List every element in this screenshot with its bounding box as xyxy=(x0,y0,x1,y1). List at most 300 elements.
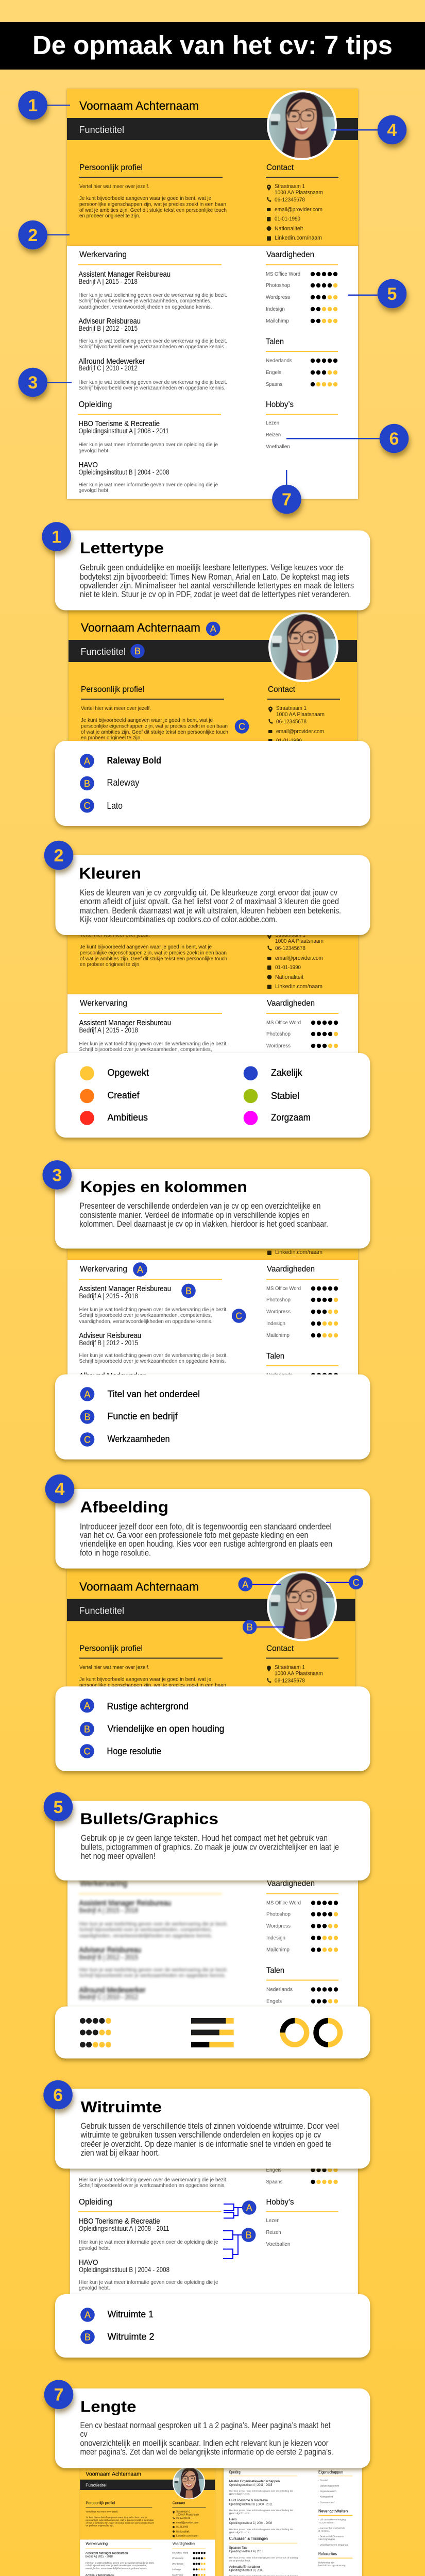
panel: annotated cv overview: Nationaliteit xyxy=(275,226,303,232)
panel: annotated cv overview: Photoshop xyxy=(266,282,290,289)
heading: Afbeelding xyxy=(80,1498,168,1516)
panel: tip 7 cv page 2 miniature: beschikbaar op aanvraag xyxy=(318,2564,346,2567)
panel: annotated cv overview: Vertel hier wat meer over jezelf. xyxy=(79,183,149,190)
body text: consistente manier. Verdeel de informatie op in verschillende kopjes en xyxy=(79,1210,310,1220)
panel: tip 3 legend: A xyxy=(84,1389,91,1399)
panel: tip 4 afbeelding xyxy=(45,1475,370,1568)
badge 7: 7 xyxy=(54,2385,63,2405)
panel: tip 7 cv page 1 miniature: MS Office Word xyxy=(172,2552,189,2555)
panel: annotated cv overview: Bedrijf C | 2010 - 2012 xyxy=(78,364,138,372)
panel: tip 6 legend xyxy=(55,2294,370,2358)
panel: tip 6 cv excerpt: Opleidingsinstituut B | 2004 - 2008 xyxy=(79,2266,169,2274)
panel: tip 7 cv page 1 miniature: Werkervaring xyxy=(86,2541,108,2546)
panel: tip 7 cv page 1 miniature: of wat je ambities zijn. Geef dit stukje tekst een persoonlijke touch xyxy=(86,2521,154,2524)
callouts on photo tip 4: A xyxy=(242,1580,248,1590)
panel: annotated cv overview: Persoonlijk profiel xyxy=(79,163,143,172)
panel: tip 1 cv excerpt xyxy=(69,607,357,762)
panel: tip 7 cv page 2 miniature: Opleidingsinstituut B | 2008 - 2011 xyxy=(229,2503,273,2506)
panel: tip 5 cv excerpt xyxy=(67,1876,358,2010)
panel: tip 1 cv excerpt: Functietitel xyxy=(80,647,126,657)
heading: Kopjes en kolommen xyxy=(80,1178,247,1196)
panel: tip 2 colour legend: Ambitieus xyxy=(107,1112,148,1123)
panel: tip 7 cv page 2 miniature: Opleidingsinstituut B | 2009 xyxy=(229,2569,263,2572)
panel: tip 1 legend: Lato xyxy=(107,801,123,811)
panel: tip 4 cv excerpt: Persoonlijk profiel xyxy=(79,1645,143,1653)
panel: tip 6 witruimte xyxy=(43,2080,370,2168)
heading: Lengte xyxy=(80,2398,136,2416)
panel: annotated cv overview: Mailchimp xyxy=(266,318,289,324)
callout badges tip 1: A xyxy=(210,624,216,634)
panel: tip 7 cv page 1 miniature: persoonlijke eigenschappen zijn, wat je precies zoekt in een baan xyxy=(86,2519,154,2522)
numbered markers on overview: 3 xyxy=(28,373,38,393)
panel: tip 5 cv excerpt: Talen xyxy=(266,1966,284,1975)
panel: tip 4 cv excerpt: Functietitel xyxy=(79,1605,124,1616)
panel: tip 6 cv excerpt: Spaans xyxy=(266,2179,282,2185)
body text: vriendelijke en open houding. Kies voor een rustige achtergrond en plaats een xyxy=(80,1539,332,1549)
panel: tip 1 cv excerpt: of wat je ambities zijn. Geef dit stukje tekst een persoonlijke touch xyxy=(81,729,228,735)
panel: tip 5 cv excerpt: MS Office Word xyxy=(266,1900,301,1906)
badge 3 xyxy=(42,1160,72,1190)
panel: tip 7 cv page 1 miniature: Je kunt bijvoorbeeld aangeven waar je goed in bent, wat je xyxy=(86,2516,147,2519)
blurred left column: Allround Medewerker xyxy=(79,1987,146,1995)
badge 1: 1 xyxy=(52,528,61,547)
panel: annotated cv overview: Bedrijf A | 2015 - 2018 xyxy=(78,278,138,285)
panel: tip 7 cv page 1 miniature: Nationaliteit xyxy=(176,2530,190,2533)
panel: annotated cv overview: gevolgd hebt. xyxy=(78,487,110,494)
panel: tip 7 cv page 2 miniature: Referenties xyxy=(318,2552,337,2556)
body text: creëer je overzicht. Op deze manier is de informatie snel te vinden en goed te xyxy=(80,2139,332,2149)
badge 2: 2 xyxy=(54,846,63,866)
body text xyxy=(80,2420,333,2457)
blurred left column: Werkervaring xyxy=(80,1879,127,1888)
whitespace brackets and callouts: B xyxy=(246,2230,252,2240)
panel: tip 1 legend: A xyxy=(84,756,90,767)
bar ratings xyxy=(191,2018,234,2047)
heading: Bullets/Graphics xyxy=(80,1809,218,1828)
body text xyxy=(79,1201,328,1229)
panel: tip 7 cv page 1 miniature: Schrijf bijvoorbeeld over je werkzaamheden, competenties, xyxy=(86,2564,147,2567)
body text xyxy=(80,888,341,924)
panel: annotated cv overview: Engels xyxy=(266,369,281,376)
panel: tip 3 legend: Titel van het onderdeel xyxy=(107,1389,200,1399)
panel: tip 7 cv page 2 miniature: - Bestuurslid Gemeente xyxy=(318,2535,344,2538)
panel: tip 1 cv excerpt: en probeer origineel te zijn. xyxy=(81,735,142,741)
panel: annotated cv overview: Straatnaam 1 xyxy=(275,183,305,190)
panel: annotated cv overview: Hier kun je wat meer informatie geven over de opleiding die je xyxy=(78,442,218,448)
body text: meer pagina’s. Zet dan wel de belangrijkste informatie op de eerste 2 pagina’s. xyxy=(80,2447,333,2457)
panel: tip 2 cv excerpt: Straatnaam 1 xyxy=(275,932,305,938)
callout badges tip 1: C xyxy=(239,721,245,732)
blurred left column: Schrijf bijvoorbeeld over je werkzaamheden, competenties, xyxy=(79,1927,212,1933)
panel: annotated cv overview: Allround Medewerker xyxy=(78,358,145,366)
panel: tip 6 cv excerpt: Hobby’s xyxy=(266,2198,294,2207)
panel: tip 2 cv excerpt: en probeer origineel te zijn. xyxy=(80,961,141,968)
numbered markers on overview: 7 xyxy=(282,490,292,510)
panel: tip 7 cv page 2 miniature: - Klantgericht xyxy=(318,2496,333,2499)
panel: tip 7 cv page 2 miniature: - Organisatorisch xyxy=(318,2490,336,2493)
panel: tip 7 cv page 2 miniature: X Heren 1 xyxy=(318,2530,330,2533)
panel: tip 2 cv excerpt: email@provider.com xyxy=(275,955,323,961)
panel: tip 4 cv excerpt: Voornaam Achternaam xyxy=(79,1580,199,1593)
panel: tip 1 cv excerpt: email@provider.com xyxy=(276,728,324,735)
numbered markers on overview: 1 xyxy=(28,96,38,115)
panel: tip 6 legend: A xyxy=(84,2310,91,2320)
panel: tip 2 colour legend: Opgewekt xyxy=(107,1067,149,1078)
panel: tip 2 cv excerpt: Je kunt bijvoorbeeld aangeven waar je goed in bent, wat je xyxy=(80,944,212,950)
panel: tip 3 legend: C xyxy=(84,1434,91,1445)
panel: tip 1 lettertype xyxy=(42,522,370,610)
blurred left column: Schrijf bijvoorbeeld over je werkzaamheden en opgedane kennis. xyxy=(79,1972,226,1978)
badge 3: 3 xyxy=(52,1165,62,1185)
badge 6 xyxy=(43,2080,73,2109)
body text: cv xyxy=(80,2429,88,2439)
panel: tip 5 bullets graphics xyxy=(44,1792,370,1880)
blurred left column: Bedrijf C | 2010 - 2012 xyxy=(79,1993,138,2001)
panel: tip 2 cv excerpt: Wordpress xyxy=(266,1043,291,1049)
panel: tip 2 cv excerpt: 06-12345678 xyxy=(275,945,305,952)
panel: tip 6 legend: B xyxy=(84,2332,91,2342)
body text: onoverzichtelijk en moeilijk scanbaar. Indien echt relevant kun je kiezen voor xyxy=(80,2438,329,2448)
panel: tip 7 cv page 1 miniature: Indesign xyxy=(172,2568,181,2571)
panel: tip 1 cv excerpt: Contact xyxy=(268,685,296,694)
panel: tip 4 cv excerpt: Je kunt bijvoorbeeld aangeven waar je goed in bent, wat je xyxy=(79,1676,211,1683)
panel: annotated cv overview: Contact xyxy=(266,163,294,172)
panel: tip 2 cv excerpt: 01-01-1990 xyxy=(275,964,301,971)
panel: tip 2 cv excerpt: Linkedin.com/naam xyxy=(275,984,322,990)
panel: tip 6 cv excerpt: Engels xyxy=(266,2167,281,2173)
panel: annotated cv overview: Adviseur Reisbureau xyxy=(78,317,141,326)
panel: tip 7 cv page 2 miniature: Hier kun je wat meer informatie geven over de opleiding die xyxy=(229,2509,293,2512)
body text: Gebruik tussen de verschillende titels of zinnen voldoende witruimte. Door veel xyxy=(80,2121,339,2131)
panel: tip 3 cv excerpt: Linkedin.com/naam xyxy=(275,1249,322,1256)
panel: annotated cv overview: persoonlijke eigenschappen zijn, wat je precies zoekt in een baan xyxy=(79,201,226,207)
body text: niet te klein. Stuur je cv op in PDF, zodat je weet dat de lettertypes niet veranderen. xyxy=(80,589,351,599)
panel: tip 7 cv page 2 miniature: Opleiding xyxy=(229,2470,241,2475)
badge 4 xyxy=(45,1475,74,1503)
body text: het nog meer opvallen! xyxy=(81,1851,156,1861)
panel: tip 2 cv excerpt: Nationaliteit xyxy=(275,974,303,980)
blurred left column: Bedrijf B | 2012 - 2015 xyxy=(79,1954,138,1961)
panel: tip 7 cv page 2 miniature: gevolgd hebt. xyxy=(229,2512,250,2515)
panel: tip 6 cv excerpt: Voetballen xyxy=(266,2241,291,2247)
panel: annotated cv overview: gevolgd hebt. xyxy=(78,448,110,454)
panel: annotated cv overview: of wat je ambities zijn. Geef dit stukje tekst een persoonlijke touch xyxy=(79,207,227,213)
panel: tip 3 legend: Werkzaamheden xyxy=(107,1434,170,1444)
title bar: De opmaak van het cv: 7 tips xyxy=(32,30,393,60)
panel: annotated cv overview: Opleiding xyxy=(78,400,112,409)
panel: tip 1 legend xyxy=(55,741,370,826)
donut charts xyxy=(283,2021,340,2045)
panel: annotated cv overview xyxy=(67,89,358,499)
panel: tip 6 cv excerpt: Opleiding xyxy=(79,2198,112,2207)
panel: tip 7 cv page 2 miniature: - Oplossingsgericht xyxy=(318,2484,339,2487)
panel: tip 1 legend: Raleway xyxy=(107,777,139,788)
body text: Kies de kleuren van je cv zorgvuldig uit. De kleurkeuze zorgt ervoor dat jouw cv xyxy=(80,888,337,897)
badge 1 xyxy=(42,522,71,551)
panel: annotated cv overview: Voetballen xyxy=(266,444,290,450)
panel: annotated cv overview: Reizen xyxy=(266,432,281,438)
body text: kolommen. Deel daarnaast je cv op in vlakken, hierdoor is het goed scanbaar. xyxy=(79,1219,328,1229)
body text xyxy=(81,1833,339,1861)
body text: van het cv. Ga voor een professionele foto met gepaste kleding en een xyxy=(80,1530,308,1540)
panel: tip 7 cv page 1 miniature: Voornaam Achternaam xyxy=(86,2471,141,2477)
panel: tip 6 cv excerpt: gevolgd hebt. xyxy=(79,2285,110,2291)
panel: tip 3 cv excerpt: Allround Medewerker xyxy=(79,1372,146,1380)
numbered markers on overview: 5 xyxy=(387,284,397,304)
panel: tip 7 cv page 1 miniature: Persoonlijk profiel xyxy=(86,2500,115,2505)
panel: tip 7 cv page 2 miniature: Opleidingsinstituut A | 2013 xyxy=(229,2550,263,2553)
panel: tip 2 cv excerpt: persoonlijke eigenschappen zijn, wat je precies zoekt in een baan xyxy=(80,950,227,956)
panel: tip 5 cv excerpt: Indesign xyxy=(266,1935,285,1941)
panel: annotated cv overview: Indesign xyxy=(266,306,285,312)
body text: enorm afleidt of juist opvalt. Ga het liefst voor 2 of maximaal 3 kleuren die goed xyxy=(80,896,339,906)
panel: tip 7 cv page 1 miniature: Linkedin.com/naam xyxy=(176,2535,198,2538)
body text: Gebruik geen onduidelijke en moeilijk leesbare lettertypes. Veilige keuzes voor de xyxy=(80,563,344,572)
panel: tip 5 cv excerpt: Mailchimp xyxy=(266,1946,290,1953)
heading: Kleuren xyxy=(79,865,141,883)
panel: tip 7 cv page 1 miniature: Photoshop xyxy=(172,2557,183,2560)
panel: tip 7 cv page 1 miniature: Contact xyxy=(173,2500,185,2505)
numbered markers on overview: 6 xyxy=(389,429,399,449)
body text: Kijk voor kleurcombinaties op coolors.co of color.adobe.com. xyxy=(80,914,277,924)
panel: tip 7 cv page 2 miniature: Eigenschappen xyxy=(318,2470,343,2475)
numbered markers on overview xyxy=(18,91,409,514)
panel: tip 7 cv page 1 miniature: vaardigheden, verantwoordelijkheden en opgedane kennis. xyxy=(86,2567,147,2570)
panel: tip 7 cv page 1 miniature: Wordpress xyxy=(172,2563,184,2566)
panel: tip 2 cv excerpt: of wat je ambities zijn. Geef dit stukje tekst een persoonlijke touch xyxy=(80,956,227,962)
panel: annotated cv overview: Assistent Manager Reisbureau xyxy=(78,270,171,279)
panel: tip 2 colour legend: Stabiel xyxy=(271,1091,299,1101)
panel: tip 7 cv page 1 miniature: Vaardigheden xyxy=(173,2541,195,2546)
panel: annotated cv overview: en probeer origineel te zijn. xyxy=(79,213,140,219)
panel: tip 5 cv excerpt: Vaardigheden xyxy=(267,1879,315,1888)
panel: annotated cv overview: vaardigheden, verantwoordelijkheden en opgedane kennis. xyxy=(78,304,212,310)
panel: annotated cv overview: Bedrijf B | 2012 - 2015 xyxy=(78,325,138,332)
panel: tip 6 cv excerpt: Hier kun je wat toelichting geven over de werkervaring die je bezit. xyxy=(79,2177,228,2183)
body text: Een cv bestaat normaal gesproken uit 1 a 2 pagina’s. Meer pagina’s maakt het xyxy=(80,2420,331,2430)
panel: tip 3 cv excerpt: Talen xyxy=(266,1352,284,1361)
panel: annotated cv overview: Nederlands xyxy=(266,358,292,364)
panel: tip 2 cv excerpt: MS Office Word xyxy=(266,1020,301,1026)
panel: tip 1 legend: C xyxy=(83,801,91,811)
panel: annotated cv overview: Voornaam Achternaam xyxy=(79,99,199,112)
panel: annotated cv overview: 01-01-1990 xyxy=(275,216,300,222)
panel: tip 3 cv excerpt: Hier kun je wat toelichting geven over de werkervaring die je bezit. xyxy=(79,1307,228,1313)
panel: annotated cv overview: Je kunt bijvoorbeeld aangeven waar je goed in bent, wat je xyxy=(79,195,211,201)
callouts on photo tip 4: B xyxy=(247,1622,253,1632)
panel: tip 3 cv excerpt: Photoshop xyxy=(266,1297,291,1303)
panel: tip 7 cv page 2 miniature: gevolgd hebt. xyxy=(229,2493,250,2496)
panel: tip 1 cv excerpt: 1000 AA Plaatsnaam xyxy=(276,711,325,718)
panel: tip 7 cv page 2 miniature: - Commercieel xyxy=(318,2501,334,2504)
panel: tip 2 kleuren xyxy=(44,841,370,935)
panel: tip 7 cv page 1 miniature: 1000 AA Plaatsnaam xyxy=(176,2513,199,2516)
panel: tip 7 cv page 2 miniature: gevolgd hebt. xyxy=(229,2531,250,2534)
body text xyxy=(80,2121,339,2158)
panel: tip 3 legend: Functie en bedrijf xyxy=(107,1411,178,1421)
panel: tip 7 cv page 2 miniature: - Lid van wielervereniging xyxy=(318,2518,346,2521)
panel: tip 2 cv excerpt: Photoshop xyxy=(266,1031,291,1037)
badge 5 xyxy=(44,1792,73,1821)
panel: tip 2 cv excerpt xyxy=(67,929,358,1059)
panel: tip 6 cv excerpt xyxy=(70,2166,358,2297)
panel: tip 7 cv page 1 miniature: en probeer origineel te zijn. xyxy=(86,2524,114,2528)
panel: tip 1 cv excerpt: Vertel hier wat meer over jezelf. xyxy=(81,705,151,711)
panel: tip 2 cv excerpt: Vertel hier wat meer over jezelf. xyxy=(80,932,150,938)
dot ratings xyxy=(80,2018,111,2047)
panel: tip 3 cv excerpt: Werkervaring xyxy=(80,1265,127,1274)
panel: tip 7 cv page 2 miniature: Opleidingsinstituut A | 2011 - 2015 xyxy=(229,2483,273,2487)
panel: tip 3 cv excerpt: MS Office Word xyxy=(266,1285,301,1292)
body text: Introduceer jezelf door een foto, dit is tegenwoordig een standaard onderdeel xyxy=(80,1521,332,1531)
panel: tip 1 cv excerpt: Je kunt bijvoorbeeld aangeven waar je goed in bent, wat je xyxy=(81,717,213,723)
badge 6: 6 xyxy=(53,2086,63,2105)
panel: annotated cv overview: Hier kun je wat toelichting geven over de werkervaring die je bezit. xyxy=(78,338,227,344)
body text: Gebruik op je cv geen lange teksten. Houd het compact met het gebruik van xyxy=(81,1833,328,1843)
panel: tip 5 cv excerpt: Photoshop xyxy=(266,1911,291,1918)
body text xyxy=(80,1521,332,1558)
panel: tip 7 cv page 2 miniature: TC De Wielen xyxy=(318,2521,334,2524)
panel: tip 3 cv excerpt: Vaardigheden xyxy=(267,1265,315,1274)
panel: annotated cv overview: Linkedin.com/naam xyxy=(275,235,322,241)
whitespace brackets and callouts xyxy=(223,2200,257,2259)
panel: annotated cv overview: Talen xyxy=(266,337,284,346)
panel: tip 3 cv excerpt: Bedrijf B | 2012 - 2015 xyxy=(79,1339,138,1347)
panel: annotated cv overview: Functietitel xyxy=(79,125,124,135)
panel: tip 7 cv page 1 miniature: Bedrijf A | 2015 - 2018 xyxy=(86,2555,113,2558)
panel: tip 2 colour legend: Zakelijk xyxy=(271,1067,302,1078)
blurred left column: Hier kun je wat toelichting geven over de werkervaring die je bezit. xyxy=(79,1967,228,1973)
panel: tip 6 cv excerpt: HBO Toerisme & Recreatie xyxy=(79,2217,160,2226)
title bar xyxy=(0,22,425,70)
panel: annotated cv overview: Wordpress xyxy=(266,294,290,300)
callout badges tip 1 xyxy=(130,622,249,734)
panel: tip 1 cv excerpt: 01-01-1990 xyxy=(276,738,302,744)
panel: tip 3 cv excerpt: Bedrijf A | 2015 - 2018 xyxy=(79,1292,138,1300)
blurred left column: Hier kun je wat toelichting geven over de werkervaring die je bezit. xyxy=(79,1921,228,1927)
body text: zien wat bij elkaar hoort. xyxy=(80,2148,160,2158)
panel: tip 7 cv page 2 miniature: Hier kun je wat meer informatie geven over de opleiding die xyxy=(229,2528,293,2531)
panel: tip 6 legend: Witruimte 1 xyxy=(107,2309,154,2319)
panel: tip 3 legend xyxy=(55,1375,370,1460)
callout badges tip 1: B xyxy=(134,646,141,656)
panel: tip 6 legend: Witruimte 2 xyxy=(107,2332,155,2342)
panel: tip 1 cv excerpt: persoonlijke eigenschappen zijn, wat je precies zoekt in een baan xyxy=(81,723,228,730)
panel: tip 7 cv page 2 miniature: Animatie/Entertainer xyxy=(229,2565,261,2569)
panel: annotated cv overview: email@provider.com xyxy=(275,207,322,213)
panel: tip 7 cv page 1 miniature: 06-12345678 xyxy=(176,2517,191,2520)
callouts on photo tip 4 xyxy=(238,1575,363,1634)
badge 7 xyxy=(44,2380,73,2409)
panel: tip 7 cv page 2 miniature: Master Organisatiewetenschappen xyxy=(229,2480,280,2483)
panel: tip 7 cv page 2 miniature: Hier kun je wat meer informatie geven over de cursus of training xyxy=(229,2556,298,2560)
panel: tip 3 cv excerpt: Wordpress xyxy=(266,1309,291,1315)
panel: tip 7 cv page 2 miniature: Referenties zijn xyxy=(318,2562,334,2565)
panel: annotated cv overview: Hier kun je wat toelichting geven over de werkervaring die je bezit. xyxy=(78,379,227,385)
panel: annotated cv overview: Spaans xyxy=(266,381,282,387)
panel: tip 4 cv excerpt: Contact xyxy=(266,1645,294,1653)
panel: tip 4 legend: Rustige achtergrond xyxy=(107,1701,189,1711)
panel: tip 7 cv page 2 miniature: Cursussen & Trainingen xyxy=(229,2536,268,2541)
panel: tip 2 colour legend: Zorgzaam xyxy=(271,1112,311,1123)
panel: annotated cv overview: Werkervaring xyxy=(79,250,127,259)
callout badges tip 3: A xyxy=(137,1264,143,1275)
panel: tip 4 cv excerpt: persoonlijke eigenschappen zijn, wat je precies zoekt in een baan xyxy=(79,1682,226,1688)
panel: tip 4 legend xyxy=(56,1686,370,1771)
panel: tip 2 colour legend: Creatief xyxy=(107,1090,140,1100)
blurred left column xyxy=(79,1879,228,2001)
callouts on photo tip 4: C xyxy=(352,1578,360,1588)
body text: Presenteer de verschillende onderdelen van je cv op een overzichtelijke en xyxy=(79,1201,320,1211)
panel: tip 2 cv excerpt: Assistent Manager Reisbureau xyxy=(79,1019,171,1027)
panel: tip 5 cv excerpt: Nederlands xyxy=(266,1987,293,1993)
panel: annotated cv overview: 06-12345678 xyxy=(275,197,305,203)
panel: tip 3 cv excerpt: Schrijf bijvoorbeeld over je werkzaamheden en opgedane kennis. xyxy=(79,1358,226,1364)
panel: tip 6 cv excerpt: Reizen xyxy=(266,2229,281,2235)
panel: annotated cv overview: Hobby’s xyxy=(266,400,294,409)
panel: tip 6 cv excerpt: Opleidingsinstituut A | 2008 - 2011 xyxy=(79,2225,169,2232)
panel: tip 7 cv page 2 miniature: Havo xyxy=(229,2518,237,2521)
body text: opvallender zijn. Minimaliseer het aantal verschillende lettertypes en maak de letters xyxy=(80,581,354,590)
panel: annotated cv overview: HAVO xyxy=(78,461,98,469)
panel: tip 4 legend: Vriendelijke en open houding xyxy=(107,1723,225,1734)
panel: tip 3 cv excerpt: Nederlands xyxy=(266,1372,293,1378)
panel: annotated cv overview: Lezen xyxy=(266,420,279,426)
panel: tip 3 cv excerpt: Hier kun je wat toelichting geven over de werkervaring die je bezit. xyxy=(79,1352,228,1359)
panel: tip 1 cv excerpt: 06-12345678 xyxy=(276,719,307,725)
panel: tip 7 cv page 2 miniature: - Creatief xyxy=(318,2479,328,2482)
panel: tip 2 colour legend xyxy=(56,1053,370,1138)
panel: tip 7 cv page 2 miniature: Opleidingsinstituut C | 2004 - 2008 xyxy=(229,2521,272,2525)
panel: tip 7 cv page 1 miniature: Assistent Manager Reisbureau xyxy=(86,2552,128,2555)
body text: bullets, pictogrammen of graphics. Zo maak je jouw cv overzichtelijker en laat je xyxy=(81,1842,339,1852)
panel: annotated cv overview: Schrijf bijvoorbeeld over je werkzaamheden en opgedane kennis. xyxy=(78,344,226,350)
panel: annotated cv overview: 1000 AA Plaatsnaam xyxy=(275,190,323,196)
panel: tip 6 cv excerpt: HAVO xyxy=(79,2259,98,2267)
panel: tip 4 legend: Hoge resolutie xyxy=(107,1746,161,1756)
panel: tip 7 lengte xyxy=(44,2380,370,2468)
panel: tip 1 cv excerpt: Voornaam Achternaam xyxy=(81,621,200,634)
body text: bodytekst zijn bijvoorbeeld: Times New Roman, Arial en Lato. De koptekst mag iets xyxy=(80,572,349,582)
panel: tip 5 graphic examples xyxy=(55,2006,370,2059)
panel: annotated cv overview: Opleidingsinstituut A | 2008 - 2011 xyxy=(78,427,169,435)
body text: matchen. Bedenk daarnaast wat je wilt uitstralen, kleuren hebben een betekenis. xyxy=(80,906,341,916)
panel: tip 2 cv excerpt: Werkervaring xyxy=(80,999,127,1008)
blurred left column: vaardigheden, verantwoordelijkheden en opgedane kennis. xyxy=(79,1933,212,1939)
panel: tip 4 legend: C xyxy=(83,1747,91,1757)
panel: tip 1 cv excerpt: Persoonlijk profiel xyxy=(81,685,144,694)
panel: tip 6 cv excerpt: Lezen xyxy=(266,2217,280,2224)
panel: tip 4 cv excerpt: 06-12345678 xyxy=(275,1677,305,1684)
panel: tip 6 cv excerpt: gevolgd hebt. xyxy=(79,2245,110,2251)
panel: tip 7 cv page 1 miniature: 01-01-1990 xyxy=(176,2526,188,2529)
panel: annotated cv overview: Vaardigheden xyxy=(266,250,314,259)
whitespace brackets and callouts: A xyxy=(246,2203,252,2213)
panel: tip 2 cv excerpt: 1000 AA Plaatsnaam xyxy=(275,938,324,944)
panel: tip 3 cv excerpt: Assistent Manager Reisbureau xyxy=(79,1285,171,1293)
numbered markers on overview: 4 xyxy=(387,121,397,140)
panel: tip 4 cv excerpt: Straatnaam 1 xyxy=(275,1664,305,1670)
blurred left column: Assistent Manager Reisbureau xyxy=(79,1899,171,1907)
panel: tip 7 cv page 1 miniature: Vertel hier wat meer over jezelf. xyxy=(86,2511,118,2514)
callout badges tip 3: C xyxy=(235,1311,242,1321)
panel: tip 7 cv page 1 miniature: email@provider.com xyxy=(176,2521,198,2524)
panel: tip 4 cv excerpt: Vertel hier wat meer over jezelf. xyxy=(79,1664,149,1670)
callout badges tip 3: B xyxy=(185,1286,192,1296)
panel: tip 2 cv excerpt: Schrijf bijvoorbeeld over je werkzaamheden, competenties, xyxy=(79,1046,212,1053)
heading: Witruimte xyxy=(80,2098,162,2116)
body text xyxy=(80,563,354,599)
